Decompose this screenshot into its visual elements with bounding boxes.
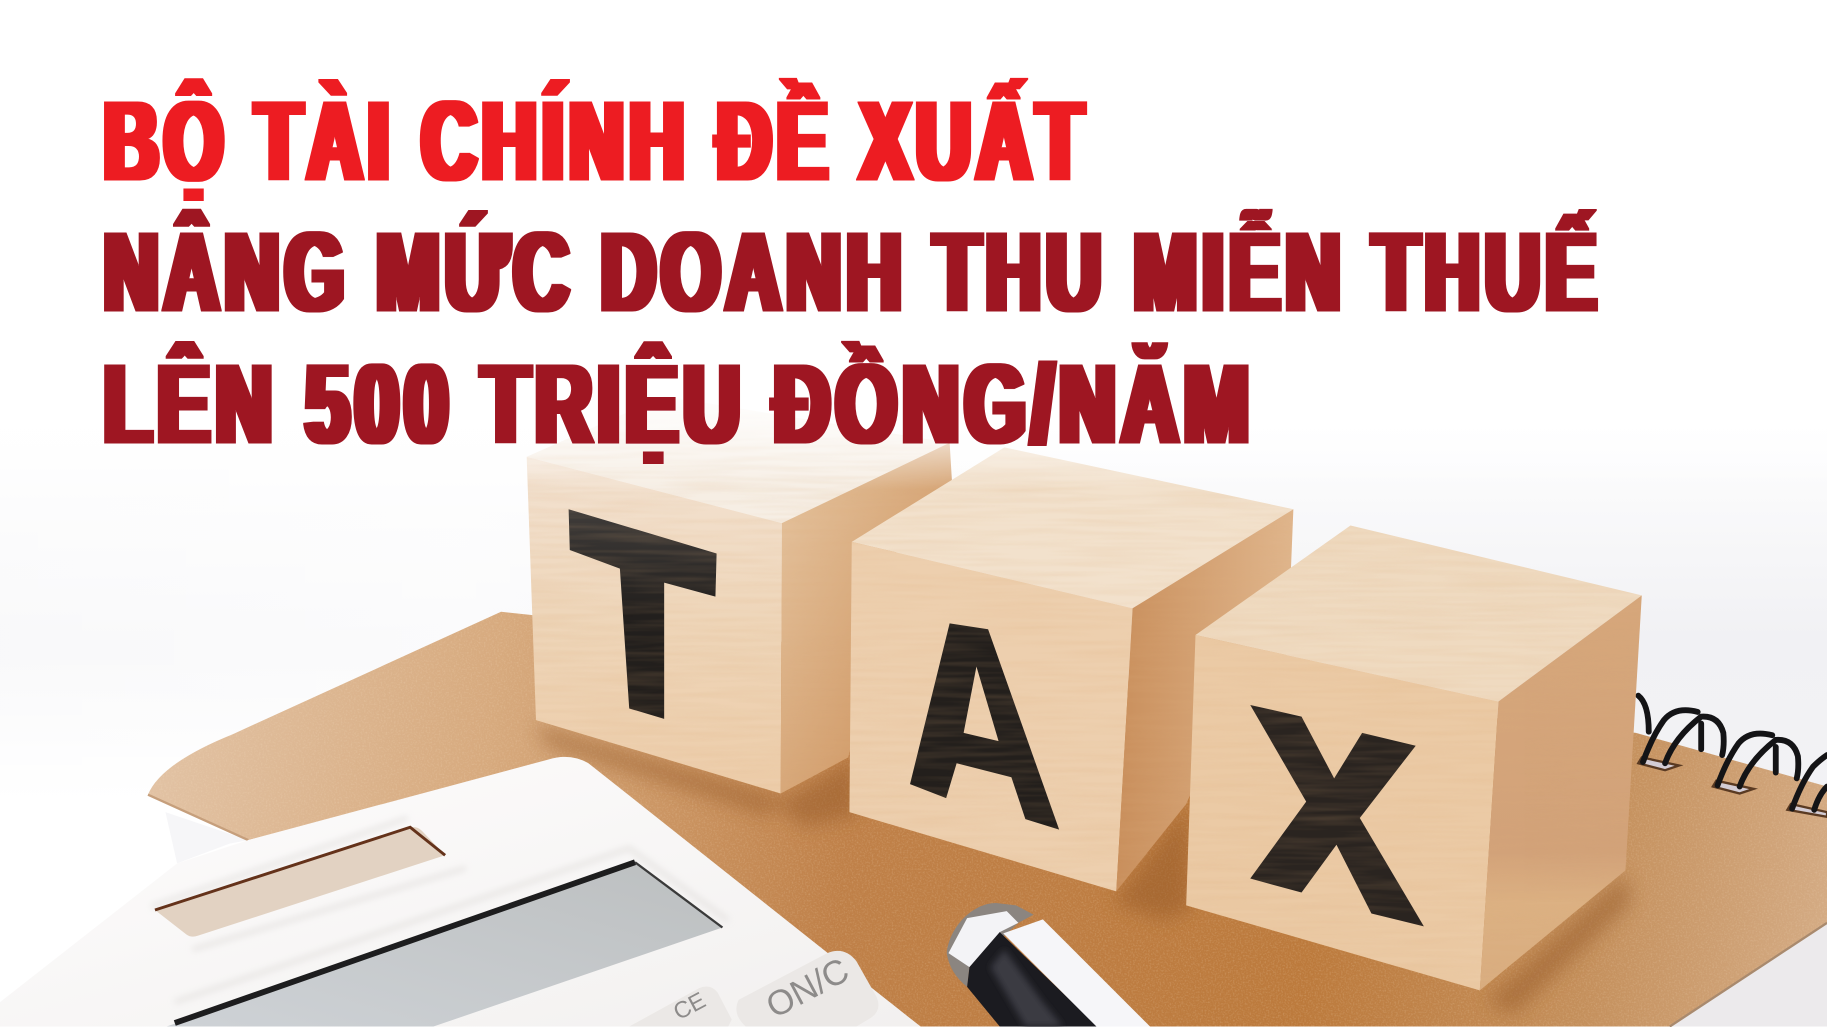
notebook: [140, 606, 1827, 1027]
calculator: [0, 757, 921, 1027]
CE button: CE: [669, 987, 710, 1025]
letter X: [1250, 705, 1424, 926]
title line 3: LÊN 500 TRIỆU ĐỒNG/NĂM: [104, 341, 1255, 467]
fade behind title: [0, 379, 1827, 489]
CE button: [629, 987, 732, 1027]
title line 1: BỘ TÀI CHÍNH ĐỀ XUẤT: [104, 78, 1089, 204]
ON/C button: ON/C: [760, 950, 855, 1026]
letter A: [910, 623, 1059, 830]
wood grain texture: [528, 458, 1585, 926]
wooden block X: [1186, 526, 1642, 990]
letter T: [569, 509, 717, 719]
title: [104, 78, 1602, 467]
LCD display: [167, 862, 722, 1027]
block shadows: [536, 725, 1631, 1014]
pen: [947, 903, 1150, 1027]
solar panel: [155, 827, 445, 937]
wooden block T: [527, 396, 952, 794]
wooden block A: [849, 447, 1293, 891]
ON/C button: [736, 950, 878, 1027]
notebook spiral binding: [1638, 696, 1827, 817]
